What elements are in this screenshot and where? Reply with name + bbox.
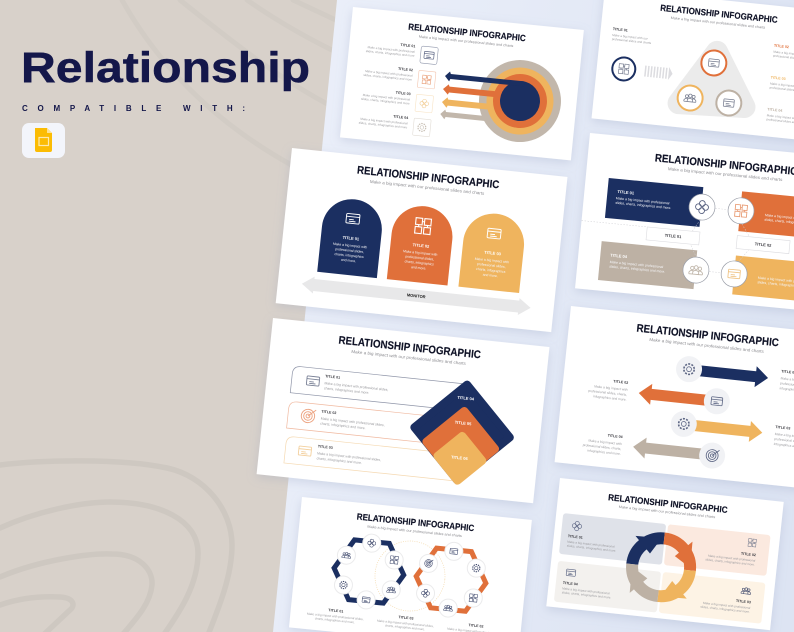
text: row 2: TITLE 02 xyxy=(321,410,337,415)
text: title 01 xyxy=(779,369,794,394)
icon: panel 4 xyxy=(566,569,576,576)
box: taupe xyxy=(598,241,697,289)
row 1 text xyxy=(366,40,416,58)
text: navy arch: Make a big impact with xyxy=(333,242,368,249)
icon box 2 xyxy=(417,70,436,89)
row 4 text: slides, charts, infographics and more xyxy=(358,121,408,130)
slide title: RELATIONSHIP INFOGRAPHIC xyxy=(408,22,527,43)
text: title 03: TITLE 03 xyxy=(775,425,791,431)
panel: arches slide xyxy=(276,148,567,332)
icon circle: gears xyxy=(670,410,698,438)
diamond labels: TITLE 04 xyxy=(457,395,475,402)
text: orange box xyxy=(764,213,794,227)
text: row 2: charts, infographics and more. xyxy=(320,422,366,430)
subheading: compatible with: COMPATIBLE WITH: xyxy=(22,104,245,113)
slide title: RELATIONSHIP INFOGRAPHIC xyxy=(660,3,779,25)
text: navy arch: TITLE 01 xyxy=(342,235,360,242)
row 4 text: TITLE 04 xyxy=(393,115,408,120)
text: row 2 xyxy=(320,410,386,432)
text: taupe box xyxy=(609,253,667,274)
text: title 04 xyxy=(766,107,794,125)
heading: Relationship: Relationship xyxy=(21,44,310,92)
slide subtitle: Make a big impact with our professional slides and charts xyxy=(367,525,462,538)
text: title 01 xyxy=(612,27,653,45)
row 4 text xyxy=(358,111,409,130)
row 4 text: Make a big impact with professional xyxy=(360,117,408,126)
text: navy arch: charts, infographics xyxy=(334,252,364,259)
text: title 02: TITLE 02 xyxy=(774,44,789,49)
text: title 03 xyxy=(377,613,435,632)
text: navy arch: professional slides, xyxy=(335,247,364,254)
text: panel 4: Make a big impact with professional xyxy=(562,586,610,595)
text: gold arch: and more. xyxy=(482,273,498,278)
text: title 03: charts, infographics and more. xyxy=(385,623,425,631)
row 1 text: Make a big impact with professional xyxy=(367,45,415,54)
icon box 4 xyxy=(413,118,431,137)
text: panel 4 xyxy=(562,581,613,600)
box: orange xyxy=(738,191,794,240)
panel: top center slide, concentric circles xyxy=(340,7,584,160)
row outline 3 xyxy=(284,436,455,481)
text: title 03: Make a big impact with professional slides, xyxy=(377,619,434,628)
panel: hexagon slide xyxy=(289,497,532,632)
diamond: gold xyxy=(435,434,485,483)
text: title 03 xyxy=(769,76,794,94)
text: title 02: TITLE 02 xyxy=(468,623,484,629)
icon circle: navy xyxy=(688,193,716,221)
text: panel 2: Make a big impact with professional xyxy=(708,554,756,563)
dashed center circle xyxy=(372,538,448,614)
text: row 1: TITLE 01 xyxy=(325,374,340,380)
text: title 04: infographics and more. xyxy=(587,449,621,456)
icon: row 1 xyxy=(306,376,320,386)
panel: arrows slide xyxy=(555,306,794,491)
text: row 1: Make a big impact with professional slides, xyxy=(324,381,389,392)
slide title: RELATIONSHIP INFOGRAPHIC xyxy=(356,512,475,533)
text: row 3: Make a big impact with professional slides, xyxy=(317,451,381,462)
circle: orange xyxy=(700,49,728,77)
text: panel 1 xyxy=(567,534,618,553)
text: orange arch xyxy=(401,241,439,272)
diamond labels xyxy=(451,395,475,461)
tinted panel 4 xyxy=(554,561,661,613)
row 3 text: slides, charts, infographics and more xyxy=(361,97,410,106)
row 2 text: slides, charts, infographics and more xyxy=(363,73,413,82)
icon: panel 3 xyxy=(741,587,751,594)
icon circle: orange xyxy=(727,197,755,225)
text: panel 4: slides, charts, infographics and more. xyxy=(562,590,612,600)
slide subtitle: Make a big impact with our professional slides and charts xyxy=(419,35,514,48)
arrow: navy xyxy=(699,360,769,388)
text: orange arch: professional slides, xyxy=(405,254,434,261)
text: title 01: TITLE 01 xyxy=(328,608,344,614)
hexagon: orange xyxy=(413,546,489,613)
text: panel 1: slides, charts, infographics and more. xyxy=(567,544,617,553)
row 3 text xyxy=(361,87,411,106)
row outline 2 xyxy=(287,401,458,446)
panel: right slide, quad boxes xyxy=(575,133,794,315)
text: row 1: charts, infographics and more. xyxy=(324,386,370,395)
slide subtitle: Make a big impact with our professional slides and charts xyxy=(649,337,764,354)
arrow: monitor: MONITOR xyxy=(407,292,426,299)
text: title 03 xyxy=(773,425,794,450)
text: title 01: Make a big impact with our xyxy=(612,33,648,41)
text: row 1 xyxy=(324,374,389,397)
label: title 01 xyxy=(646,227,700,245)
slide title: RELATIONSHIP INFOGRAPHIC xyxy=(636,323,779,349)
diamond: orange xyxy=(423,407,499,483)
text: title 01 xyxy=(306,606,365,625)
text: title 01: Make a big impact with professional slides, xyxy=(307,612,364,621)
decorative contour lines xyxy=(0,0,340,632)
panel: circular arrows slide xyxy=(546,478,784,630)
text: title 04: TITLE 04 xyxy=(607,434,623,439)
text: title 04: TITLE 04 xyxy=(767,107,782,113)
icon: row 2 xyxy=(301,409,316,423)
text: title 02: professional slides, charts, xyxy=(588,389,627,397)
icon: row 3 xyxy=(298,446,312,456)
text: title 04: professional slides, charts, xyxy=(582,443,622,451)
text: gold arch: TITLE 03 xyxy=(484,250,502,256)
text: panel 1: TITLE 01 xyxy=(568,534,583,540)
text: navy box: TITLE 01 xyxy=(617,189,635,196)
text: title 02 xyxy=(447,621,505,632)
label: title 01: TITLE 01 xyxy=(664,233,682,239)
slide subtitle: Make a big impact with our professional slides and charts xyxy=(671,16,766,30)
icon box 3 xyxy=(415,94,434,113)
text: title 04 xyxy=(582,431,623,456)
text: title 02: TITLE 02 xyxy=(613,379,628,385)
text: navy box: Make a big impact with professional xyxy=(616,196,670,205)
slide title: RELATIONSHIP INFOGRAPHIC xyxy=(338,335,481,361)
text: taupe box: TITLE 04 xyxy=(610,253,628,259)
text: title 02: infographics and more. xyxy=(593,394,627,402)
box: gold xyxy=(732,256,794,304)
row 1 text: slides, charts, infographics and more xyxy=(366,49,415,58)
circle: navy input xyxy=(611,56,636,82)
text: orange arch: Make a big impact with xyxy=(403,249,438,257)
arrow: striped xyxy=(644,65,673,80)
concentric circles and arrows xyxy=(438,53,565,146)
slide subtitle: Make a big impact with our professional slides and charts xyxy=(668,166,783,182)
text: gold arch xyxy=(473,249,510,279)
text: title 01: TITLE 01 xyxy=(613,27,628,33)
hexagon: navy xyxy=(331,538,407,605)
icon: panel 1 xyxy=(572,521,582,531)
icon: navy arch xyxy=(346,213,360,224)
text: title 02 xyxy=(773,44,794,62)
row 1 text: TITLE 01 xyxy=(400,43,416,48)
text: panel 3 xyxy=(700,595,751,614)
text: title 03: TITLE 03 xyxy=(770,76,786,81)
panel: diamond slide xyxy=(257,318,549,503)
icon circle: bulb xyxy=(675,355,703,383)
text: taupe box: slides, charts, infographics and more. xyxy=(609,264,665,274)
text: title 02: Make a big impact with xyxy=(594,384,628,392)
icon circle: taupe xyxy=(682,256,710,284)
icon circle: target xyxy=(698,441,726,470)
text: row 3: TITLE 03 xyxy=(318,444,333,450)
text: navy arch xyxy=(331,234,368,264)
circle: gold xyxy=(676,84,704,112)
slide title: RELATIONSHIP INFOGRAPHIC xyxy=(356,164,500,191)
gray rounded triangle xyxy=(679,48,750,110)
slide subtitle: Make a big impact with our professional slides and charts xyxy=(370,179,485,196)
text: orange arch: and more. xyxy=(411,265,427,271)
tinted panel 3 xyxy=(659,572,766,624)
connectors xyxy=(578,196,753,275)
row 3 text: TITLE 03 xyxy=(396,91,411,96)
row 2 text xyxy=(363,63,414,82)
text: gold box xyxy=(757,276,794,290)
arrow: orange xyxy=(638,383,708,411)
slide subtitle: Make a big impact with our professional slides and charts xyxy=(351,349,466,366)
circle: taupe xyxy=(715,89,743,117)
text: row 3 xyxy=(316,444,382,467)
text: navy box: slides, charts, infographics and more. xyxy=(615,201,672,210)
icon circle: gold xyxy=(720,260,748,288)
circular arrow ring xyxy=(629,535,693,599)
diamond: navy xyxy=(409,380,515,485)
arch: orange xyxy=(387,203,455,286)
diamond labels: TITLE 06 xyxy=(451,454,469,461)
text: row 3: charts, infographics and more. xyxy=(316,456,362,465)
tinted panel 2 xyxy=(664,524,771,576)
text: orange arch: charts, infographics xyxy=(404,259,434,266)
diamond labels: TITLE 05 xyxy=(455,420,472,426)
slide title: RELATIONSHIP INFOGRAPHIC xyxy=(608,492,729,515)
text: gold arch: Make a big impact with xyxy=(474,257,509,264)
arrow: gold xyxy=(693,415,763,443)
label: title 02 xyxy=(736,236,790,254)
icon box 1 xyxy=(420,46,438,65)
text: panel 3: Make a big impact with professional xyxy=(703,601,751,610)
text: gold arch: charts, infographics xyxy=(476,267,506,274)
icon: google slides badge xyxy=(22,123,65,158)
icon: gold arch xyxy=(487,228,501,239)
text: panel 1: Make a big impact with professional xyxy=(567,540,615,549)
row outline 1 xyxy=(290,366,462,410)
text: panel 2: slides, charts, infographics and more. xyxy=(705,557,755,567)
text: orange arch: TITLE 02 xyxy=(412,242,430,249)
box: navy xyxy=(605,178,703,227)
panel: top right slide, triangle xyxy=(592,0,794,142)
icon: panel 2 xyxy=(748,539,756,547)
arch: gold xyxy=(458,211,527,293)
background: blue slide area xyxy=(273,0,794,632)
arrow: taupe xyxy=(632,436,702,464)
text: panel 3: slides, charts, infographics and more. xyxy=(700,605,750,614)
text: panel 2 xyxy=(705,548,756,567)
text: title 02 xyxy=(588,377,629,402)
text: gold arch: professional slides, xyxy=(477,262,506,269)
navy hexagon icons xyxy=(332,531,405,612)
text: navy box xyxy=(615,189,673,210)
slide subtitle: Make a big impact with our professional slides and charts xyxy=(619,505,716,519)
text: panel 2: TITLE 02 xyxy=(741,552,756,557)
text: panel 4: TITLE 04 xyxy=(563,581,578,586)
arch: navy xyxy=(317,196,385,278)
text: panel 3: TITLE 03 xyxy=(736,599,751,604)
icon circle: chart xyxy=(703,387,731,416)
text: title 01: charts, infographics and more. xyxy=(315,616,355,624)
text: title 01: professional slides and charts xyxy=(612,37,652,45)
text: title 04: Make a big impact with xyxy=(588,439,622,446)
row 3 text: Make a big impact with professional xyxy=(363,93,411,102)
arrow: monitor xyxy=(301,275,531,316)
label: title 02: TITLE 02 xyxy=(755,241,772,248)
text: title 03: TITLE 03 xyxy=(398,615,414,621)
text: taupe box: Make a big impact with professional xyxy=(610,260,664,269)
text: row 2: Make a big impact with professional slides, xyxy=(321,417,385,427)
text: navy arch: and more. xyxy=(341,258,356,263)
row 2 text: Make a big impact with professional xyxy=(365,69,413,78)
row 2 text: TITLE 02 xyxy=(398,67,413,72)
icon: orange arch xyxy=(415,218,432,235)
orange hexagon icons xyxy=(414,539,488,620)
tinted panel 1 xyxy=(559,513,666,565)
